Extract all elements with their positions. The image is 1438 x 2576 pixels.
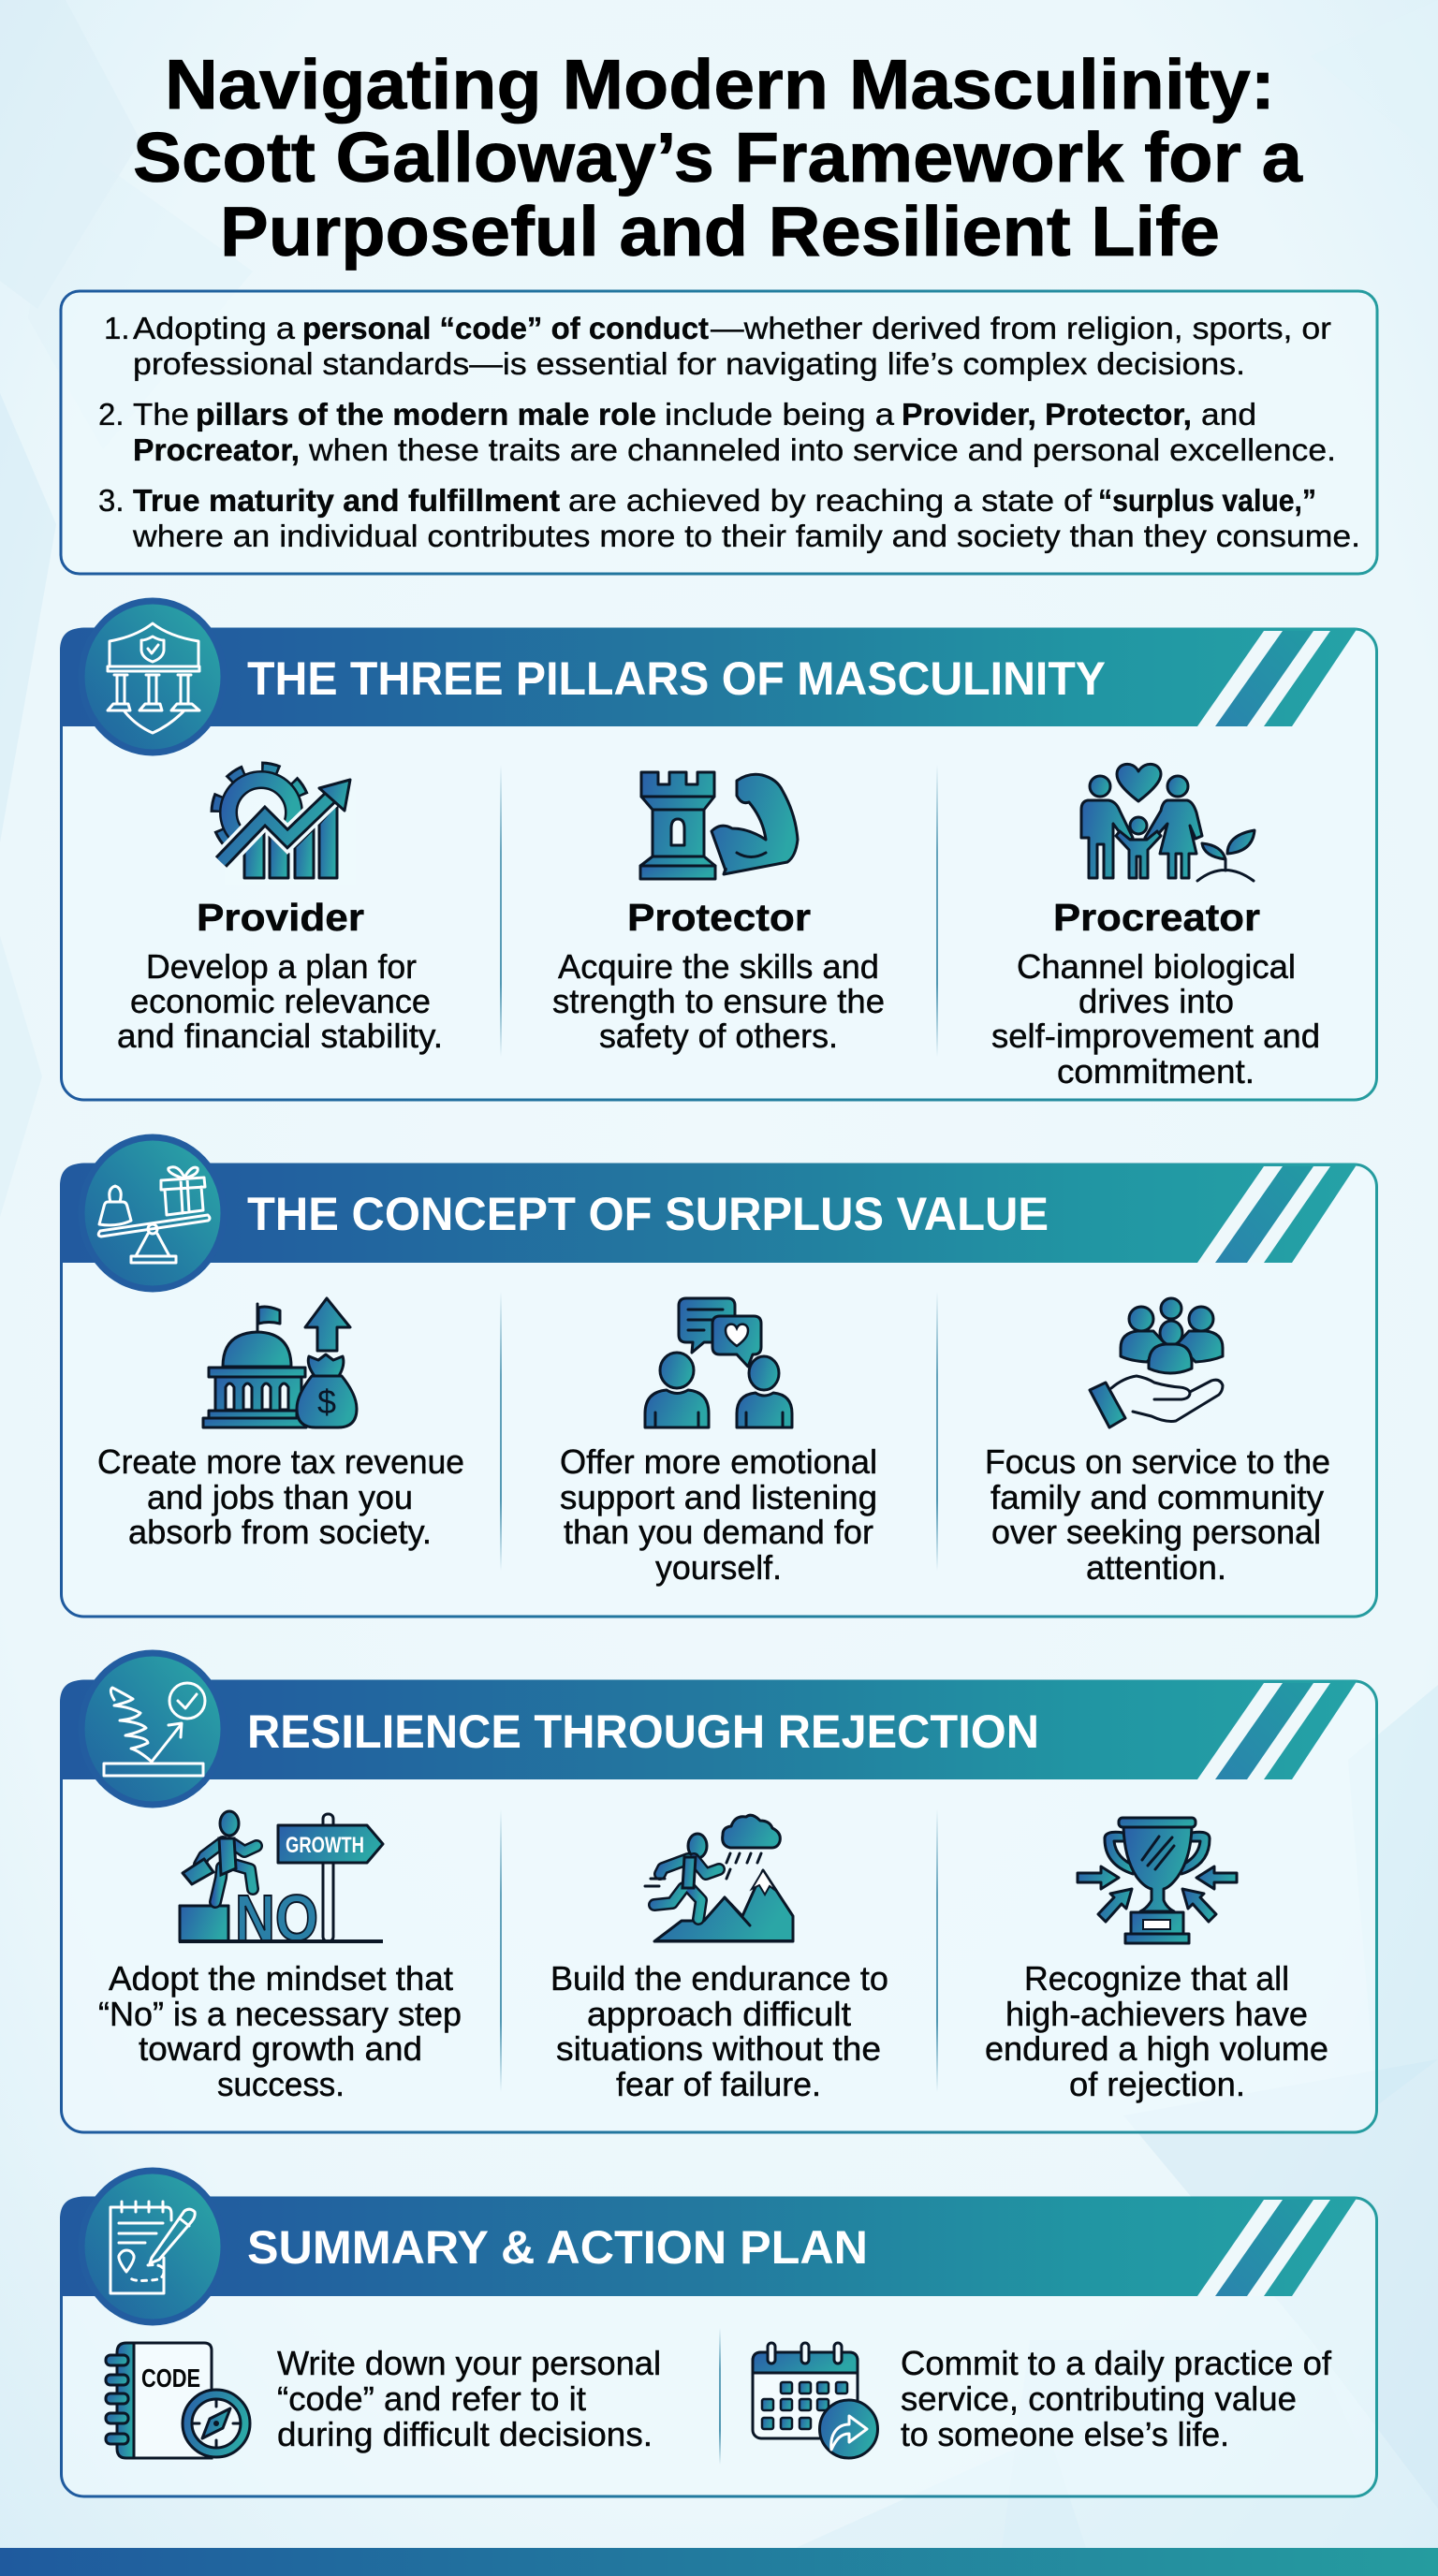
description: and financial stability.: [117, 1017, 443, 1055]
icon: person stepping over NO toward growth sign: GROWTH: [286, 1833, 364, 1858]
description: economic relevance: [130, 982, 431, 1020]
panel: key takeaways: [61, 291, 1377, 574]
panel: the three pillars of masculinity: [60, 601, 1376, 1100]
list item 1: [104, 311, 1331, 381]
section header banner: [60, 1164, 1357, 1263]
heading: provider: Provider: [197, 896, 364, 939]
description: strength to ensure the: [552, 982, 885, 1020]
description: Focus on service to the: [985, 1442, 1330, 1481]
description: “code” and refer to it: [277, 2379, 586, 2418]
description: Adopt the mindset that: [109, 1959, 453, 1998]
list item 1: —whether derived from religion, sports, or: [711, 311, 1331, 345]
description: Acquire the skills and: [558, 947, 879, 986]
list item 2: Procreator,: [133, 432, 300, 467]
action item: write your code: [106, 2343, 661, 2458]
description: [560, 1442, 877, 1587]
icon: person stepping over NO toward growth sign: [179, 1811, 383, 1954]
divider line: [936, 765, 938, 1057]
list item 2: The: [133, 397, 189, 432]
description: commitment.: [1057, 1052, 1255, 1090]
divider line: [500, 1292, 502, 1571]
description: situations without the: [556, 2029, 881, 2068]
description: during difficult decisions.: [277, 2415, 653, 2453]
description: Create more tax revenue: [97, 1442, 464, 1481]
list item 1: 1.: [104, 311, 130, 345]
description: service, contributing value: [901, 2379, 1297, 2418]
description: over seeking personal: [991, 1513, 1321, 1551]
description: Offer more emotional: [560, 1442, 877, 1481]
description: [991, 947, 1320, 1090]
section header banner: THE CONCEPT OF SURPLUS VALUE: [247, 1188, 1049, 1240]
list item 2: [98, 397, 1336, 467]
section header banner: RESILIENCE THROUGH REJECTION: [247, 1705, 1039, 1758]
icon: family with heart and sprout: [1081, 764, 1255, 881]
column: high achievers: [985, 1818, 1328, 2103]
description: absorb from society.: [128, 1513, 432, 1551]
panel: summary and action plan: [60, 2171, 1376, 2496]
panel: resilience through rejection: [60, 1653, 1376, 2132]
section header banner: [60, 1680, 1357, 1779]
title: Navigating Modern Masculinity:: [165, 45, 1275, 124]
title: [133, 45, 1303, 271]
icon: pillars and shield badge: [81, 601, 224, 753]
heading: protector: Protector: [627, 896, 811, 939]
description: [901, 2344, 1332, 2453]
list item 1: personal “code” of conduct: [302, 311, 709, 345]
section header banner: SUMMARY & ACTION PLAN: [247, 2221, 868, 2274]
column: provider: [117, 770, 443, 1055]
icon: gear with rising chart: [219, 770, 356, 885]
list item 3: where an individual contributes more to their family and society than they consume.: [132, 519, 1360, 553]
description: Develop a plan for: [146, 947, 417, 986]
list item 2: Provider, Protector,: [902, 397, 1192, 432]
description: attention.: [1086, 1548, 1226, 1587]
footer bar: [0, 2548, 1438, 2576]
list item 2: when these traits are channeled into service and personal excellence.: [308, 432, 1336, 467]
heading: procreator: Procreator: [1053, 896, 1260, 939]
icon: spring bouncing with check mark: [81, 1653, 224, 1805]
list item 2: and: [1201, 397, 1256, 432]
description: [117, 947, 443, 1055]
divider line: [500, 765, 502, 1057]
icon: capitol building and money bag: $: [317, 1383, 336, 1421]
icon: two people with chat bubbles: [645, 1298, 792, 1427]
action item: daily practice of service: [753, 2343, 1332, 2458]
description: endured a high volume: [985, 2029, 1328, 2068]
description: high-achievers have: [1005, 1995, 1308, 2033]
description: [985, 1442, 1330, 1587]
list item 3: True maturity and fulfillment: [133, 483, 560, 518]
title: Scott Galloway’s Framework for a: [133, 118, 1303, 197]
description: [98, 1959, 462, 2103]
description: [985, 1959, 1328, 2103]
icon: calendar with share arrow: [753, 2343, 878, 2458]
description: Commit to a daily practice of: [901, 2344, 1332, 2382]
description: Write down your personal: [277, 2344, 661, 2382]
divider line: [719, 2328, 721, 2465]
description: support and listening: [560, 1478, 877, 1516]
icon: code notebook and compass: [106, 2343, 250, 2458]
title: Purposeful and Resilient Life: [220, 192, 1220, 271]
list item 1: Adopting a: [133, 311, 296, 345]
description: Channel biological: [1017, 947, 1296, 986]
divider line: [500, 1809, 502, 2092]
description: toward growth and: [139, 2029, 422, 2068]
list item 3: 3.: [98, 483, 125, 518]
panel: the concept of surplus value: [60, 1137, 1376, 1617]
description: of rejection.: [1069, 2065, 1245, 2103]
icon: trophy with inward arrows: [1078, 1818, 1237, 1943]
icon: rook tower and flexed arm: [640, 772, 798, 879]
list item 2: 2.: [98, 397, 125, 432]
icon: hand holding a group of people: [1090, 1298, 1223, 1427]
icon: person stepping over NO toward growth sign: NO: [235, 1881, 318, 1954]
description: and jobs than you: [147, 1478, 413, 1516]
description: approach difficult: [587, 1995, 851, 2033]
list item 3: are achieved by reaching a state of: [568, 483, 1093, 518]
section header banner: THE THREE PILLARS OF MASCULINITY: [247, 652, 1106, 705]
description: success.: [217, 2065, 345, 2103]
icon: runner approaching storm mountain: [645, 1815, 793, 1942]
section header banner: [60, 628, 1357, 726]
description: than you demand for: [564, 1513, 873, 1551]
description: family and community: [990, 1478, 1324, 1516]
column: no is a step: [98, 1811, 462, 2103]
icon: capitol building and money bag: [203, 1298, 357, 1427]
description: yourself.: [655, 1548, 782, 1587]
column: procreator: [991, 764, 1320, 1090]
description: self-improvement and: [991, 1017, 1320, 1055]
description: “No” is a necessary step: [98, 1995, 462, 2033]
list item 2: include being a: [665, 397, 895, 432]
column: service to community: [985, 1298, 1330, 1587]
description: [97, 1442, 464, 1551]
description: to someone else’s life.: [901, 2415, 1229, 2453]
list item 3: “surplus value,”: [1098, 483, 1316, 518]
description: Recognize that all: [1024, 1959, 1289, 1998]
section header banner: [60, 2197, 1357, 2296]
description: Build the endurance to: [550, 1959, 888, 1998]
list item 1: professional standards—is essential for navigating life’s complex decisions.: [133, 346, 1245, 381]
column: tax revenue and jobs: [97, 1298, 464, 1551]
column: emotional support: [560, 1298, 877, 1587]
description: [550, 1959, 888, 2103]
icon: notebook with pen and route: [81, 2171, 224, 2322]
description: drives into: [1078, 982, 1234, 1020]
description: fear of failure.: [616, 2065, 821, 2103]
divider line: [936, 1292, 938, 1571]
list item 2: pillars of the modern male role: [196, 397, 656, 432]
column: protector: [552, 772, 885, 1055]
column: endurance: [550, 1815, 888, 2103]
description: safety of others.: [599, 1017, 838, 1055]
icon: balance scale with weight and gift: [81, 1137, 224, 1289]
description: [277, 2344, 661, 2453]
divider line: [936, 1809, 938, 2092]
description: [552, 947, 885, 1055]
icon: code notebook and compass: CODE: [141, 2364, 200, 2393]
list item 3: [98, 483, 1360, 553]
